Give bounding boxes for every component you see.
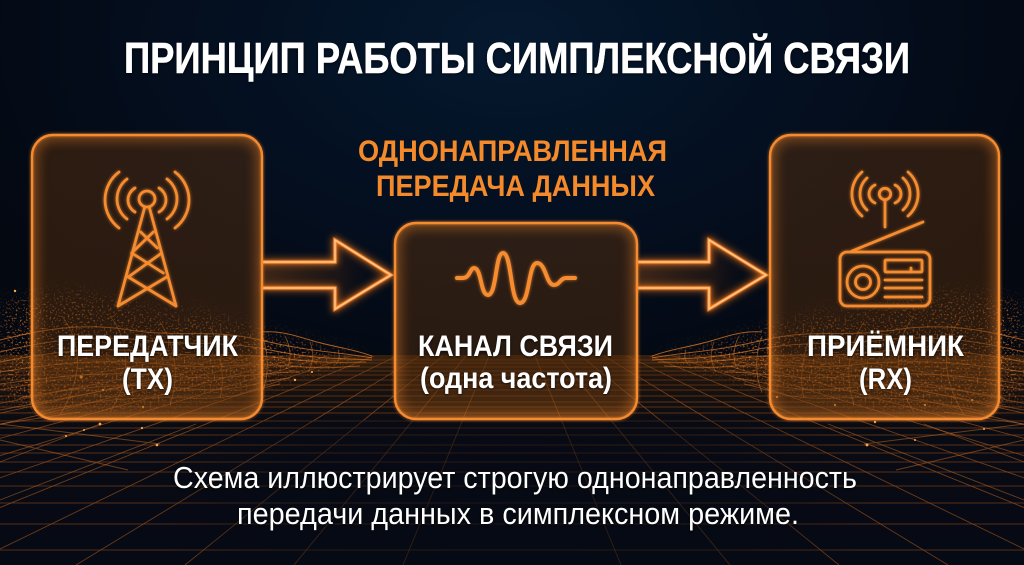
label: transmitter: (TX) — [122, 363, 173, 396]
heading: one-way data transfer: ПЕРЕДАЧА ДАННЫХ — [376, 170, 655, 203]
heading: one-way data transfer: ОДНОНАПРАВЛЕННАЯ — [358, 135, 667, 168]
panel: channel — [395, 223, 637, 419]
label: channel: КАНАЛ СВЯЗИ — [418, 330, 613, 363]
label: channel — [418, 330, 613, 395]
label: transmitter: ПЕРЕДАТЧИК — [57, 330, 239, 363]
arrow: transmitter to channel — [262, 240, 391, 309]
bright nodes on the grid — [14, 290, 985, 446]
label: receiver — [807, 330, 965, 396]
wireframe hill right — [624, 270, 1024, 500]
arrow: channel to receiver — [637, 240, 766, 309]
dim overlay behind caption — [0, 420, 1024, 565]
caption: передачи данных в симплексном режиме. — [237, 496, 799, 531]
perspective grid floor — [0, 356, 1024, 565]
label: channel: (одна частота) — [420, 362, 612, 395]
wireframe hill left — [0, 270, 400, 500]
icon: radio tower — [105, 172, 189, 306]
label: transmitter — [57, 330, 239, 396]
caption: Схема иллюстрирует строгую однонаправленность — [173, 460, 857, 495]
icon: signal wave — [457, 253, 575, 303]
panel: transmitter — [32, 135, 262, 419]
heading: one-way data transfer — [358, 135, 667, 203]
caption — [173, 460, 857, 531]
panel: receiver — [770, 135, 999, 419]
label: receiver: (RX) — [859, 363, 912, 396]
icon: radio receiver — [840, 172, 930, 306]
label: receiver: ПРИЁМНИК — [807, 330, 965, 363]
